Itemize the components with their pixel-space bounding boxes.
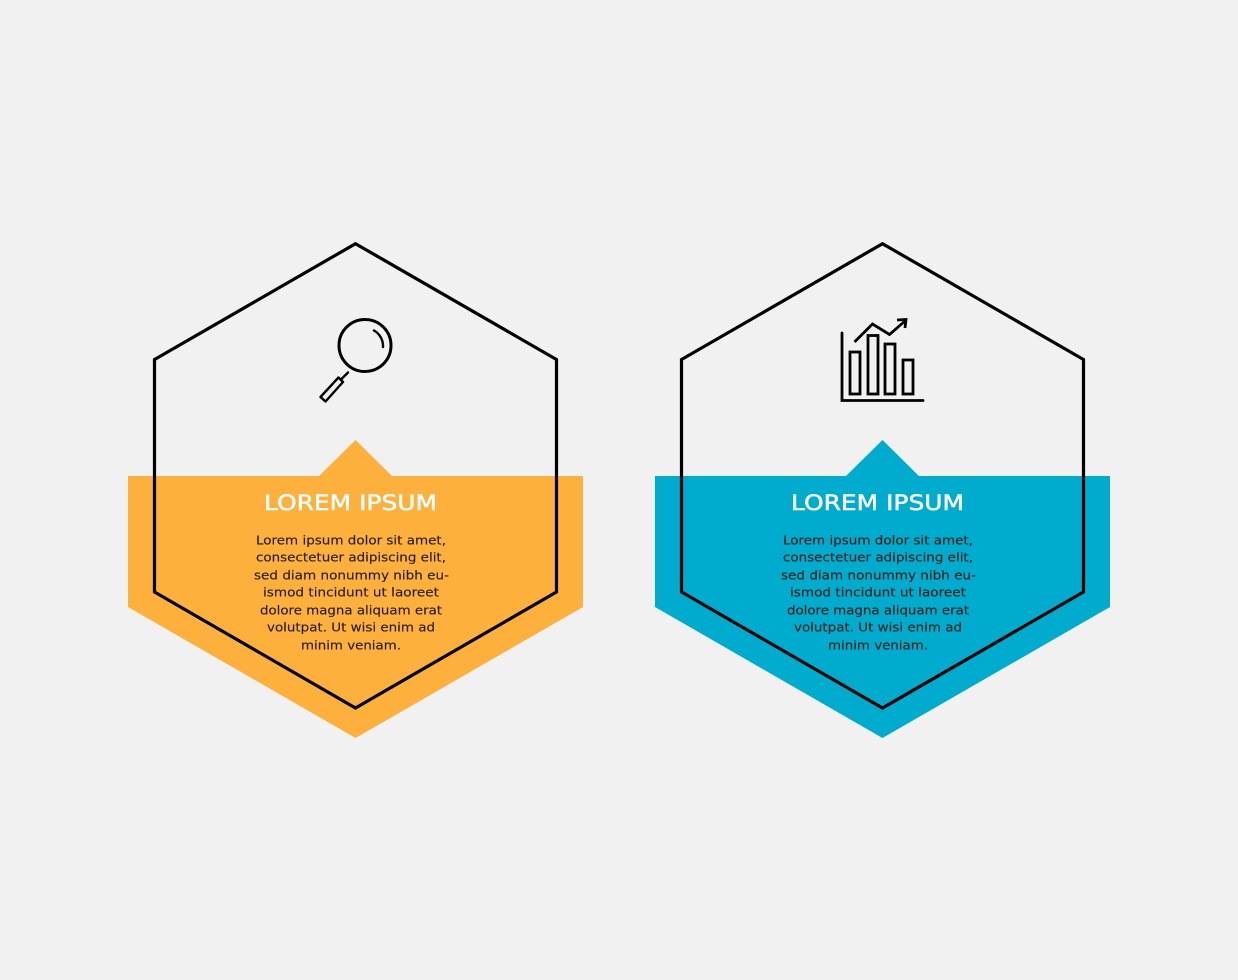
body text xyxy=(781,534,976,654)
panel: blue chart card xyxy=(655,244,1110,738)
body text: Lorem ipsum dolor sit amet, xyxy=(783,534,973,548)
heading: LOREM IPSUM xyxy=(264,491,437,516)
hexagon outline xyxy=(682,244,1084,708)
body text xyxy=(254,534,449,654)
body text: ismod tincidunt ut laoreet xyxy=(790,586,966,600)
body text: ismod tincidunt ut laoreet xyxy=(263,586,439,600)
body text: volutpat. Ut wisi enim ad xyxy=(267,620,435,636)
body text: sed diam nonummy nibh eu- xyxy=(781,568,976,584)
orange arrow banner xyxy=(128,440,583,738)
body text: minim veniam. xyxy=(301,638,401,654)
body text: Lorem ipsum dolor sit amet, xyxy=(256,534,446,548)
body text: volutpat. Ut wisi enim ad xyxy=(794,620,962,636)
panel: orange magnifier card xyxy=(128,244,583,738)
body text: dolore magna aliquam erat xyxy=(260,604,442,618)
body text: consectetuer adipiscing elit, xyxy=(256,550,446,566)
body text: sed diam nonummy nibh eu- xyxy=(254,568,449,584)
body text: dolore magna aliquam erat xyxy=(787,604,969,618)
hexagon outline xyxy=(154,244,556,708)
icon: magnifying glass xyxy=(320,320,391,402)
body text: minim veniam. xyxy=(828,638,928,654)
icon: bar chart with rising arrow xyxy=(842,320,923,400)
body text: consectetuer adipiscing elit, xyxy=(783,550,973,566)
blue arrow banner xyxy=(655,440,1110,738)
heading: LOREM IPSUM xyxy=(791,491,964,516)
